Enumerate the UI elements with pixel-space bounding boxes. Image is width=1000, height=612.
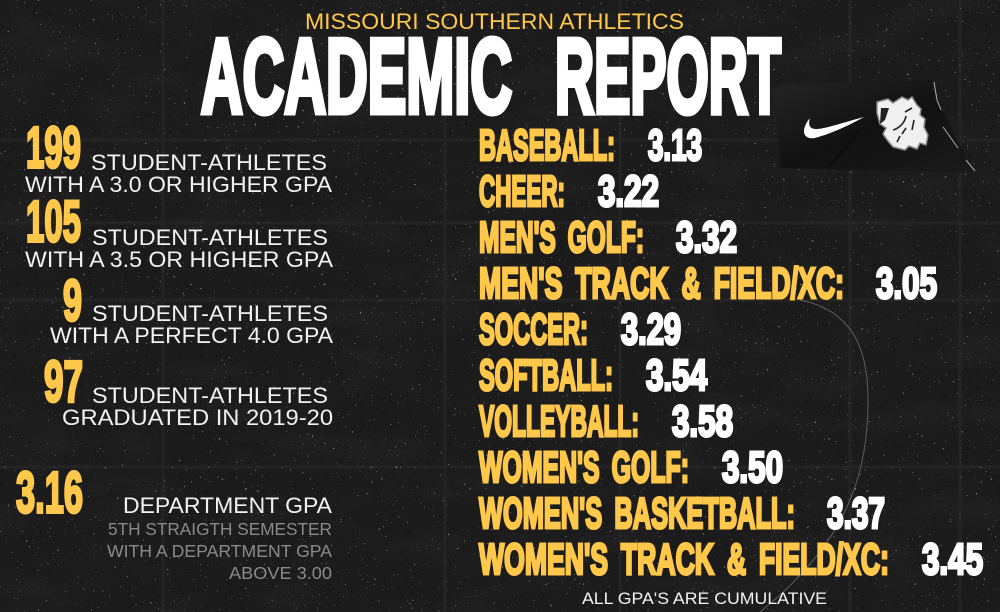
stat: 199: 199: [26, 116, 81, 180]
stat: 9: [50, 268, 333, 348]
stat: 97: STUDENT-ATHLETES: [92, 383, 328, 408]
icon: lion logo: [877, 97, 928, 150]
stat: 97: [44, 350, 333, 430]
row: men's golf: MEN'S GOLF:: [479, 213, 644, 262]
title: REPORT: [555, 18, 781, 136]
row: volleyball: 3.58: [672, 397, 733, 446]
row: softball: 3.54: [646, 351, 707, 400]
stat: 199: WITH A 3.0 OR HIGHER GPA: [25, 172, 332, 197]
stat: 9: 9: [63, 268, 82, 334]
stat: 97: GRADUATED IN 2019-20: [62, 405, 333, 430]
stat: department GPA: WITH A DEPARTMENT GPA: [107, 541, 332, 561]
stat: 105: WITH A 3.5 OR HIGHER GPA: [25, 247, 333, 272]
title: ACADEMIC: [201, 18, 512, 136]
stat: 105: STUDENT-ATHLETES: [92, 225, 328, 250]
row: women's golf: WOMEN'S GOLF:: [479, 443, 689, 492]
stat: 105: [25, 190, 333, 272]
row: soccer: SOCCER:: [479, 305, 588, 354]
row: cheer: CHEER:: [479, 167, 565, 216]
row: women's golf: 3.50: [722, 443, 783, 492]
stat: 199: STUDENT-ATHLETES: [91, 150, 327, 175]
row: women's basketball: 3.37: [827, 489, 885, 538]
stat: department GPA: DEPARTMENT GPA: [123, 493, 332, 518]
stat: department GPA: [16, 460, 332, 583]
row: cheer: 3.22: [598, 167, 659, 216]
row: softball: SOFTBALL:: [479, 351, 613, 400]
stat: department GPA: ABOVE 3.00: [229, 563, 332, 583]
icon: swoosh: [804, 117, 864, 138]
stat: 9: STUDENT-ATHLETES: [92, 301, 328, 326]
row: baseball: BASEBALL:: [479, 121, 615, 170]
stat: department GPA: 5TH STRAIGTH SEMESTER: [108, 519, 332, 539]
subtitle: MISSOURI SOUTHERN ATHLETICS: [305, 9, 684, 34]
stat: 199: [25, 116, 332, 197]
team GPA list: [479, 121, 983, 584]
stat: 9: WITH A PERFECT 4.0 GPA: [50, 323, 333, 348]
row: soccer: 3.29: [621, 305, 681, 354]
row: men's track: 3.05: [876, 259, 937, 308]
stat: 105: 105: [26, 190, 81, 254]
stats panel: [16, 116, 333, 583]
footnote: ALL GPA'S ARE CUMULATIVE: [582, 589, 827, 608]
stat: 97: 97: [44, 350, 83, 414]
stat: department GPA: 3.16: [16, 460, 83, 526]
icon: black mask with swoosh and lion logo: [770, 80, 975, 172]
row: men's golf: 3.32: [676, 213, 737, 262]
row: baseball: 3.13: [648, 121, 702, 170]
row: volleyball: VOLLEYBALL:: [479, 397, 639, 446]
